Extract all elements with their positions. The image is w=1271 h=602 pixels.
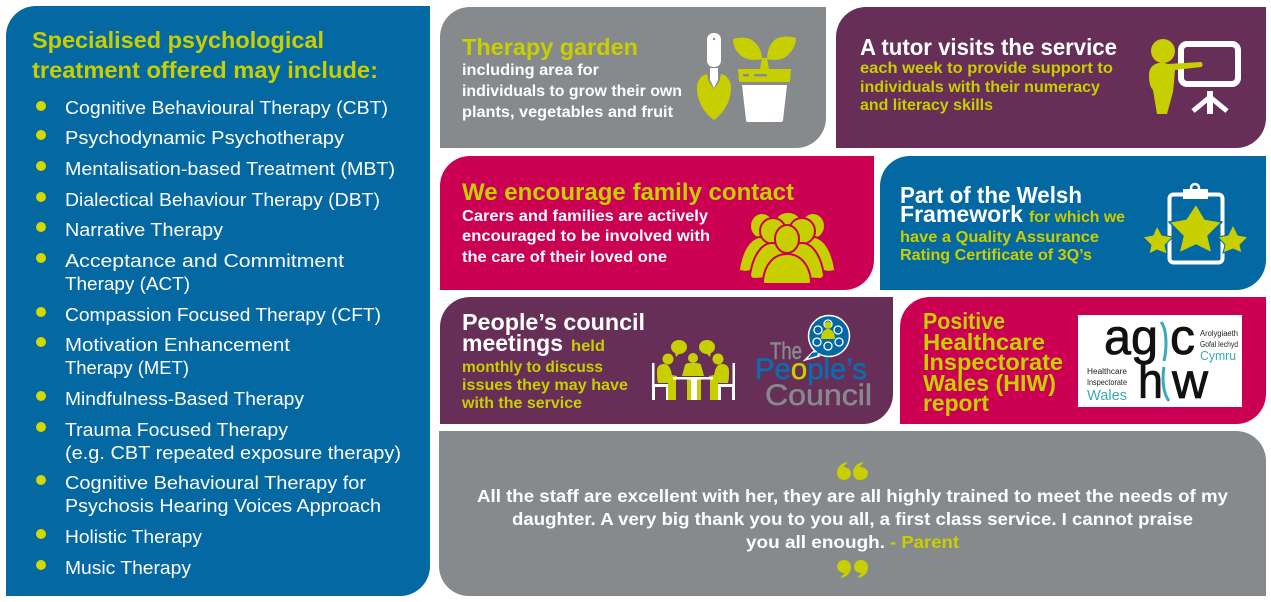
panel: welsh framework [880, 156, 1266, 290]
bullet markers [36, 101, 46, 570]
text: family description [462, 208, 710, 266]
logo: agic hiw: Healthcare [1087, 367, 1128, 376]
text: tutor description: each week to provide support to [860, 60, 1113, 77]
therapy list text: Therapy (ACT) [65, 273, 190, 294]
therapy list text: Dialectical Behaviour Therapy (DBT) [65, 189, 380, 210]
logo: agic hiw: w [1171, 353, 1209, 409]
heading: treatment: treatment offered may include: [32, 57, 378, 83]
heading: positive HIW report: Inspectorate [923, 349, 1063, 375]
logo: agic hiw: Cymru [1200, 348, 1236, 363]
text: therapy garden description: plants, vegetables and fruit [462, 104, 673, 121]
therapy list text: Trauma Focused Therapy [65, 419, 289, 440]
therapy list text: (e.g. CBT repeated exposure therapy) [65, 442, 401, 463]
text: tutor description: and literacy skills [860, 97, 993, 114]
panel: HIW report [900, 297, 1266, 424]
heading: people's council meetings: People’s council [462, 309, 645, 335]
quote text: daughter. A very big thank you to you all, a first class service. I cannot praise [512, 509, 1193, 529]
panel: people's council meetings [440, 297, 893, 424]
quote text [477, 486, 1228, 552]
icon: clipboard with stars [1143, 184, 1248, 262]
heading: welsh framework [900, 182, 1082, 227]
text: family description: encouraged to be involved with [462, 228, 710, 245]
text: quality assurance: for which we [1029, 209, 1125, 226]
therapy list text: Cognitive Behavioural Therapy for [65, 472, 366, 493]
logo: agic hiw: Inspectorate [1087, 378, 1127, 387]
logo: agic hiw: ag [1104, 309, 1158, 365]
heading: people's council meetings [462, 309, 645, 356]
therapy list text: Compassion Focused Therapy (CFT) [65, 304, 381, 325]
text: quality assurance: have a Quality Assurance [900, 229, 1099, 246]
heading: tutor: A tutor visits the service [860, 34, 1117, 60]
therapy list text: Cognitive Behavioural Therapy (CBT) [65, 97, 388, 118]
quote text: All the staff are excellent with her, they are all highly trained to meet the needs of my [477, 486, 1228, 506]
therapy list text: Mindfulness-Based Therapy [65, 388, 305, 409]
icon: meeting around table [652, 340, 735, 400]
therapy list text: Holistic Therapy [65, 526, 203, 547]
heading: positive HIW report: report [923, 390, 989, 416]
therapy list text: Psychosis Hearing Voices Approach [65, 495, 381, 516]
heading: treatment [32, 27, 378, 83]
text: family description: Carers and families are actively [462, 208, 708, 225]
text: council description: monthly to discuss [462, 359, 603, 376]
panel: tutor visits [836, 7, 1266, 148]
text: family description: the care of their loved one [462, 249, 667, 266]
text: council description: with the service [461, 395, 582, 412]
therapy list text: Psychodynamic Psychotherapy [65, 127, 345, 148]
icon: tutor at board [1149, 39, 1238, 114]
logo: the people's council: People’s [755, 353, 867, 386]
text: tutor description [860, 60, 1113, 114]
therapy list text [65, 97, 401, 578]
logo: the people's council [755, 316, 872, 412]
logo: agic hiw: c [1170, 309, 1195, 365]
therapy list text: Music Therapy [65, 557, 192, 578]
logo: agic hiw: Arolygiaeth [1200, 329, 1238, 338]
icon: family group [738, 212, 836, 284]
therapy list text: Therapy (MET) [65, 357, 189, 378]
therapy list text: Mentalisation-based Treatment (MBT) [65, 158, 395, 179]
heading: people's council meetings: meetings [462, 330, 563, 356]
logo: agic hiw: h [1138, 353, 1163, 409]
therapy list text: Acceptance and Commitment [65, 250, 344, 271]
heading: family contact: We encourage family contact [462, 179, 794, 206]
heading: positive HIW report [923, 308, 1063, 416]
panel: parent quote [439, 431, 1266, 596]
heading: therapy garden: Therapy garden [462, 34, 638, 60]
icon: potted plant [733, 37, 796, 122]
logo: the people's council: The [770, 338, 802, 365]
text: council description [461, 338, 628, 412]
logo: agic hiw: Wales [1087, 387, 1127, 404]
heading: treatment: Specialised psychological [32, 27, 324, 53]
therapy list text: Narrative Therapy [65, 219, 224, 240]
text: therapy garden description: individuals to grow their own [462, 83, 682, 100]
icon: opening quote mark [837, 462, 868, 480]
heading: positive HIW report: Positive [923, 308, 1005, 334]
text: tutor description: individuals with their numeracy [860, 79, 1100, 96]
text: therapy garden description: including area for [462, 62, 599, 79]
text: quality assurance [900, 209, 1125, 264]
heading: positive HIW report: Wales (HIW) [923, 370, 1056, 396]
panel: specialised psychological treatment list [6, 6, 430, 596]
heading: welsh framework: Part of the Welsh [900, 182, 1082, 208]
logo: agic hiw [1078, 309, 1242, 409]
quote text: - Parent [890, 532, 959, 552]
heading: welsh framework: Framework [900, 201, 1023, 227]
text: quality assurance: Rating Certificate of 3Q’s [900, 247, 1092, 264]
text: council description: held [571, 338, 605, 355]
heading: positive HIW report: Healthcare [923, 329, 1045, 355]
text: council description: issues they may have [462, 377, 628, 394]
quote text: you all enough. [746, 532, 885, 552]
text: therapy garden description [462, 62, 682, 121]
logo: agic hiw: Gofal Iechyd [1200, 340, 1238, 349]
icon: closing quote mark [837, 560, 868, 578]
therapy list text: Motivation Enhancement [65, 334, 290, 355]
logo: the people's council: Council [765, 379, 872, 412]
panel: family contact [440, 156, 874, 290]
icon: trowel [697, 33, 731, 120]
panel: therapy garden [440, 7, 826, 148]
